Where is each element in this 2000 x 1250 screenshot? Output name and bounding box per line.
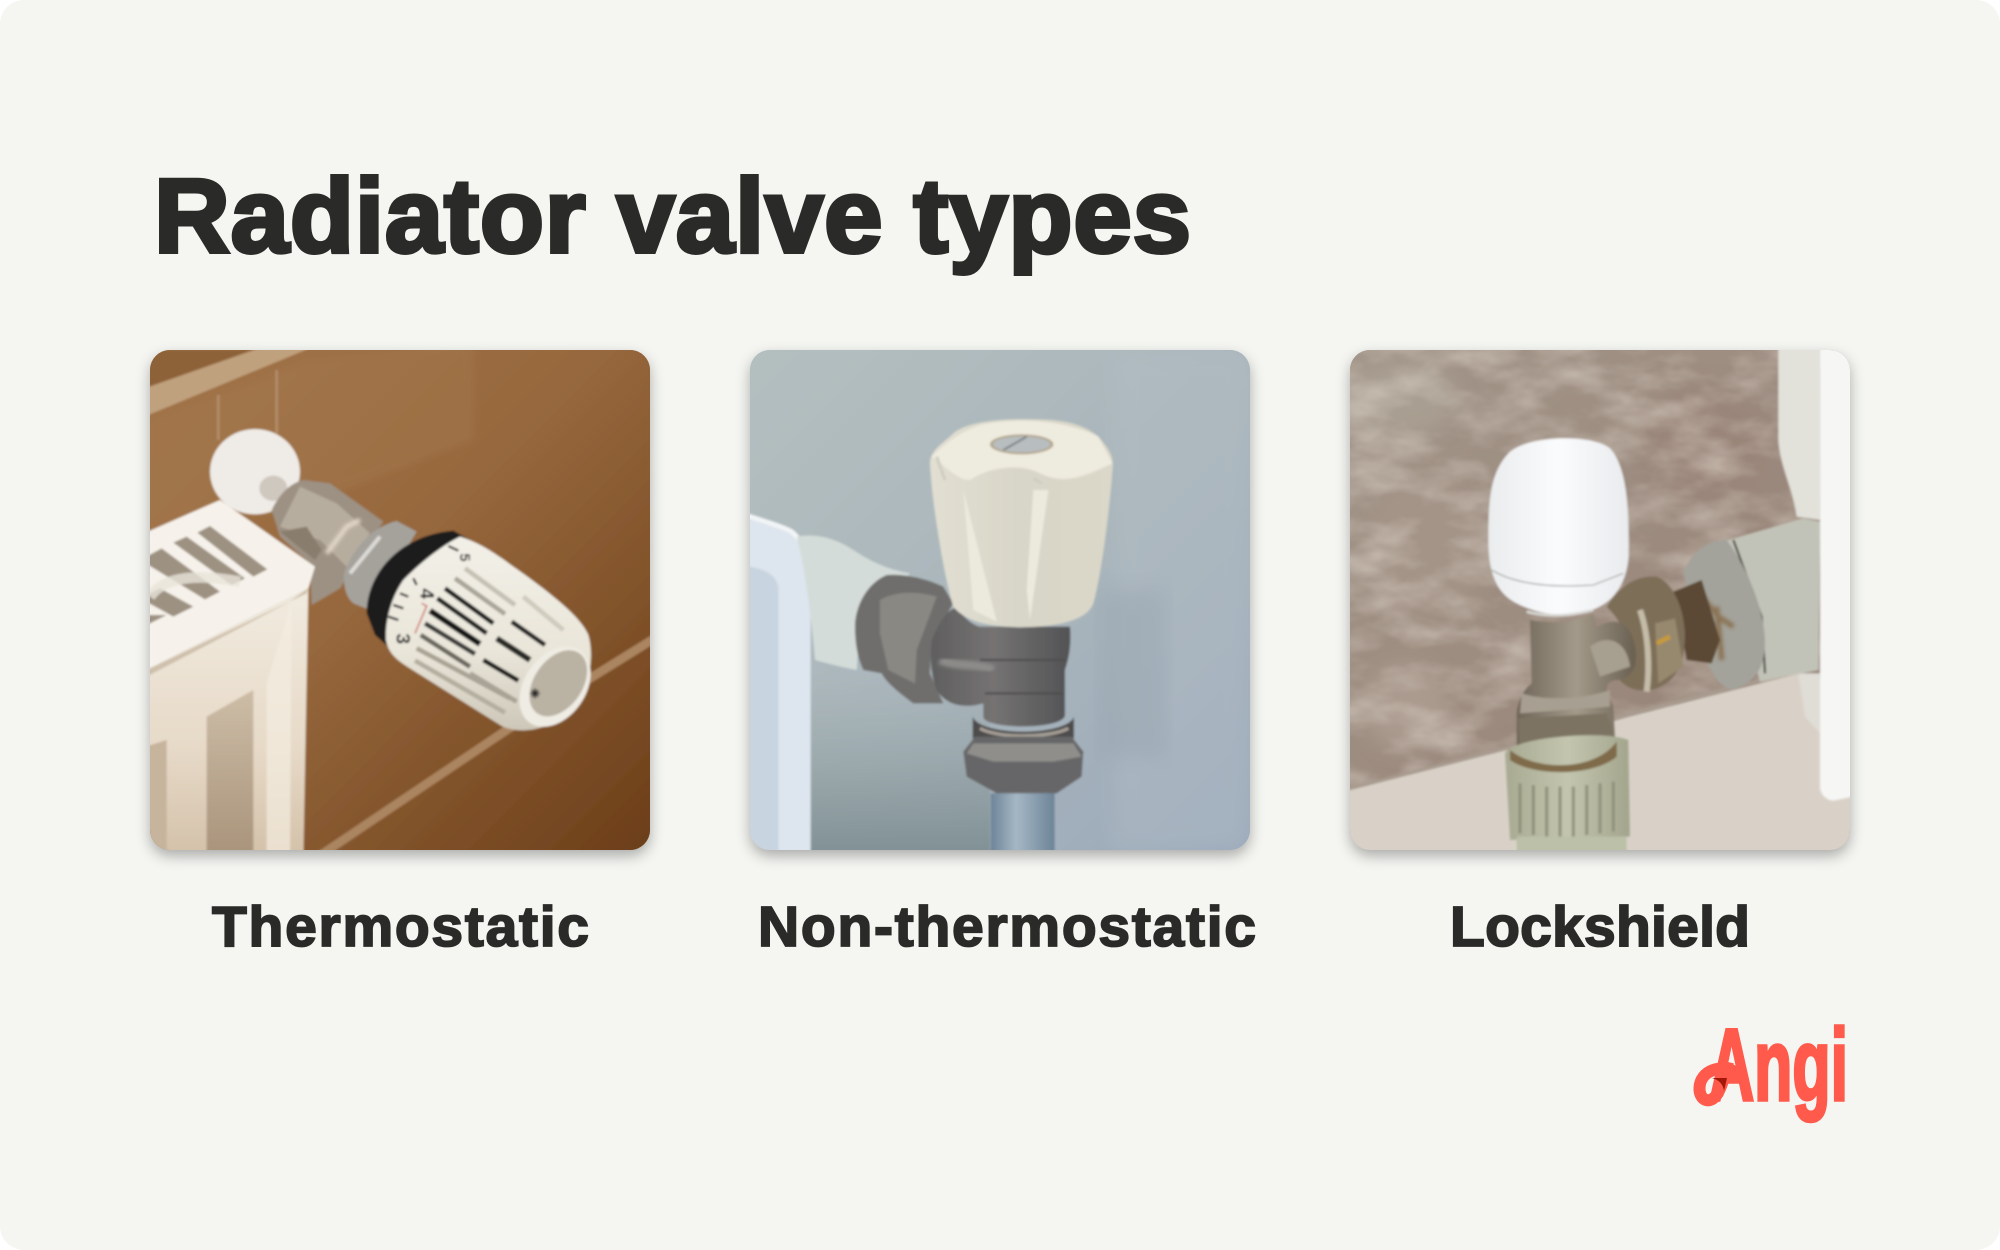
ribs xyxy=(415,568,563,713)
bronze nut xyxy=(1607,576,1685,691)
scale markings xyxy=(392,553,472,644)
radiator slots xyxy=(140,526,267,628)
lower pipe xyxy=(990,792,1056,850)
panel: thermostatic valve photo xyxy=(140,340,660,860)
radiator top xyxy=(140,500,315,673)
compression nut xyxy=(963,737,1083,793)
label: non-thermostatic: Non-thermostatic xyxy=(758,895,1256,959)
scale markings: 4 xyxy=(416,588,437,599)
label: thermostatic: Thermostatic xyxy=(212,895,589,959)
logo: Angi: Angi xyxy=(1709,1008,1848,1122)
compression ring xyxy=(973,717,1074,738)
black ring xyxy=(367,531,470,648)
grey pipe xyxy=(1723,518,1820,682)
radiator xyxy=(750,518,812,850)
wall mottling xyxy=(1372,373,1447,744)
valve body xyxy=(931,608,1070,726)
scale markings: 5 xyxy=(456,553,472,561)
wall tile top left xyxy=(140,340,473,540)
panel: non-thermostatic valve photo xyxy=(740,340,1260,860)
radiator front xyxy=(140,588,308,860)
rusted neck xyxy=(1673,580,1720,663)
panel: lockshield valve photo xyxy=(1340,340,1860,860)
connector pipe xyxy=(797,535,910,670)
wall disc xyxy=(210,429,300,514)
valve T section xyxy=(1517,613,1636,756)
white radiator right xyxy=(1778,340,1820,520)
side nut xyxy=(855,575,953,703)
white cap xyxy=(1488,438,1629,615)
shelf xyxy=(1340,673,1860,860)
title: Radiator valve types xyxy=(154,158,1191,275)
collar xyxy=(1505,735,1630,840)
pipe flange xyxy=(1683,540,1765,690)
knob xyxy=(930,419,1113,627)
valve body xyxy=(259,476,287,501)
scale markings: 3 xyxy=(392,633,413,644)
thermostat head xyxy=(386,537,591,730)
nut ring xyxy=(344,521,417,610)
logo: Angi xyxy=(1699,1008,1848,1122)
end cap xyxy=(518,648,592,729)
label: lockshield: Lockshield xyxy=(1450,895,1750,959)
white panel xyxy=(1818,350,1850,802)
